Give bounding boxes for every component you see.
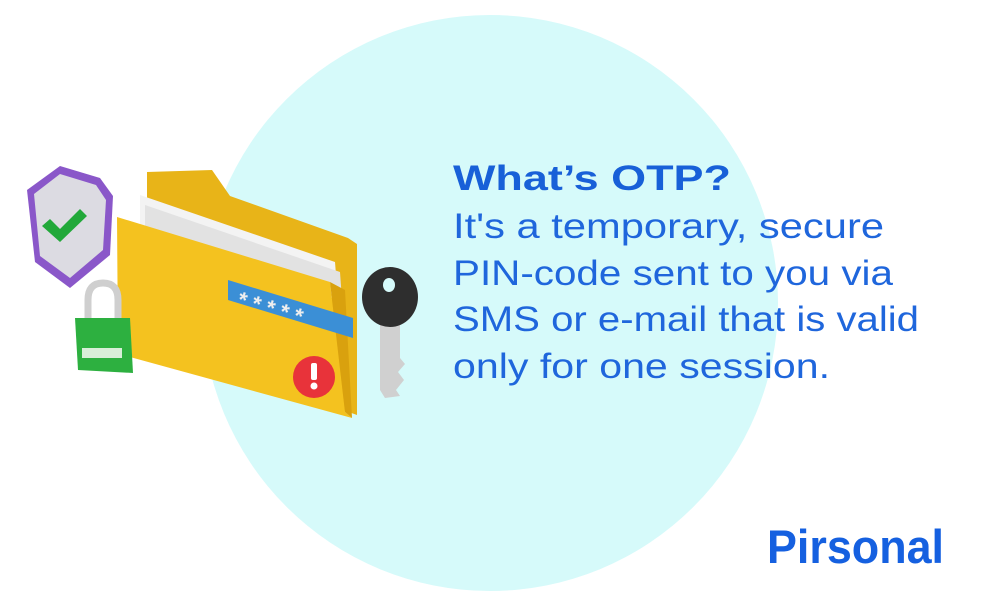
icon: padlock	[75, 283, 133, 373]
icon: password bar	[228, 280, 353, 338]
body text	[453, 207, 919, 386]
icon: key	[362, 267, 418, 398]
logo: Pirsonal	[767, 520, 944, 573]
body text: SMS or e-mail that is valid	[453, 300, 919, 339]
icon: folder	[117, 170, 357, 418]
body text: only for one session.	[453, 347, 830, 386]
body text: PIN-code sent to you via	[453, 254, 894, 293]
illustration: secure folder	[27, 166, 418, 418]
background circle	[202, 15, 778, 591]
icon: shield with check	[27, 166, 113, 288]
body text: It's a temporary, secure	[453, 207, 884, 246]
icon: password bar: *****	[235, 287, 312, 331]
heading: What’s OTP?	[453, 159, 731, 198]
icon: warning badge	[293, 356, 335, 398]
